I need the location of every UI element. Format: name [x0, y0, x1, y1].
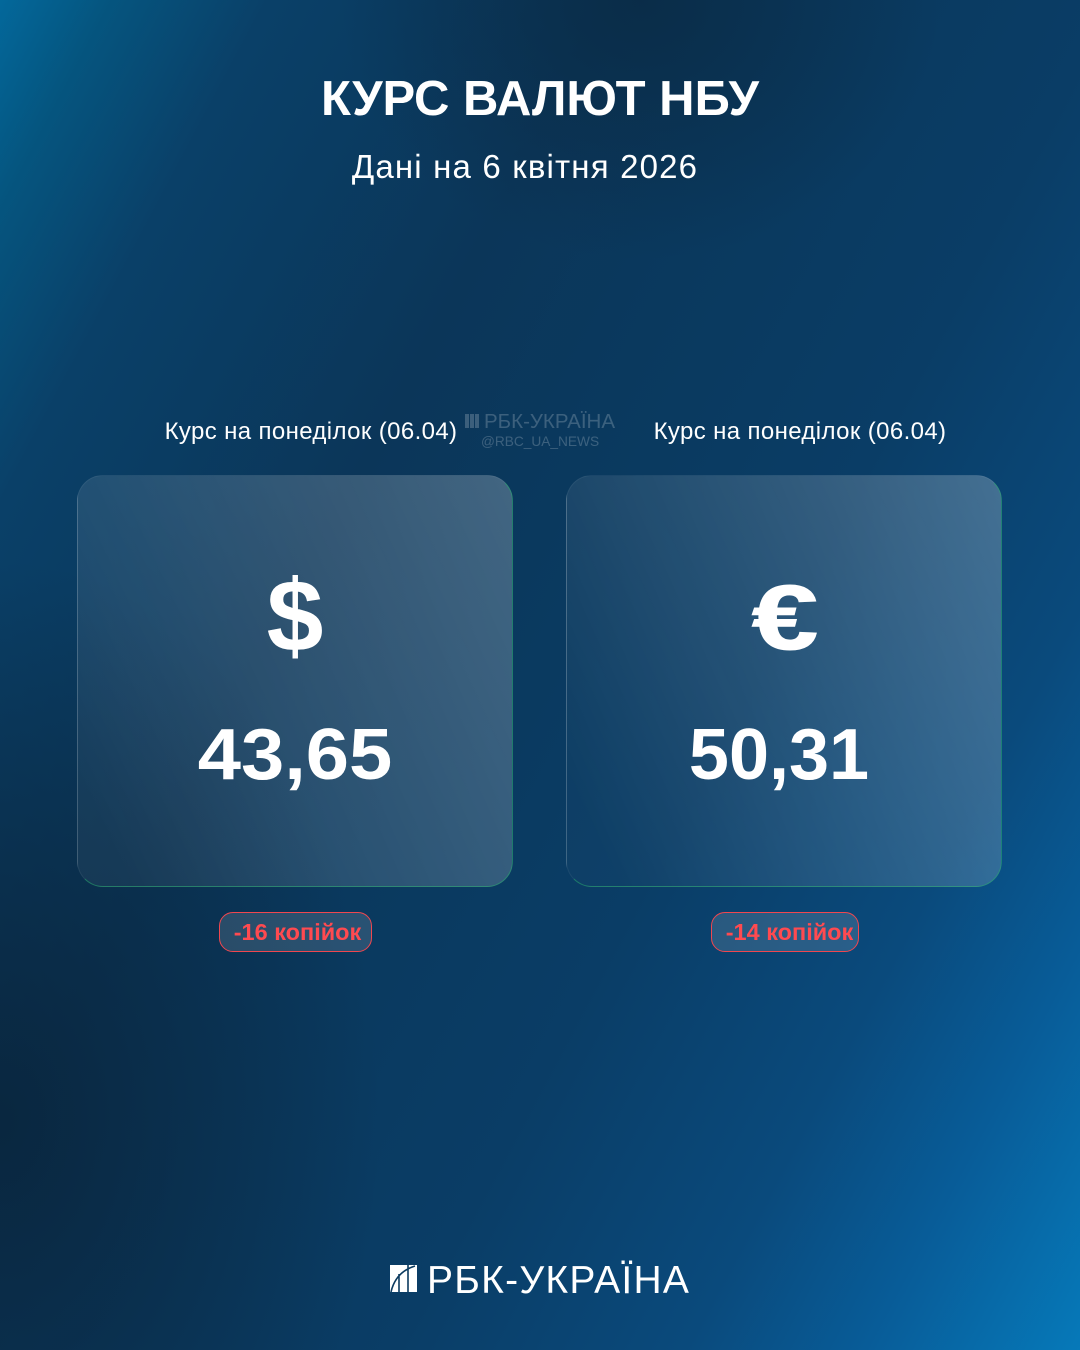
subtitle: date: Дані на 6 квітня 2026	[352, 148, 698, 185]
euro rate: 50,31	[689, 715, 869, 795]
label: euro rate date: Курс на понеділок (06.04)	[654, 418, 946, 445]
logo name: РБК-УКРАЇНА	[427, 1259, 690, 1302]
badge: euro change	[711, 912, 859, 952]
title: КУРС ВАЛЮТ НБУ	[321, 72, 759, 126]
logo mark	[390, 1265, 417, 1292]
icon: dollar sign: $	[267, 559, 323, 673]
panel: dollar	[77, 475, 513, 887]
watermark logo	[465, 414, 479, 428]
badge: dollar change: -16 копійок	[234, 919, 361, 945]
watermark handle: @RBC_UA_NEWS	[481, 434, 599, 449]
logo: RBC-Ukraine	[390, 1259, 690, 1302]
badge: euro change: -14 копійок	[726, 919, 853, 945]
watermark name: РБК-УКРАЇНА	[484, 410, 615, 433]
dollar rate: 43,65	[198, 715, 392, 795]
icon: euro sign: €	[752, 567, 818, 669]
panel: euro	[566, 475, 1002, 887]
watermark	[465, 410, 615, 449]
badge: dollar change	[219, 912, 372, 952]
label: dollar rate date: Курс на понеділок (06.04)	[165, 418, 457, 445]
